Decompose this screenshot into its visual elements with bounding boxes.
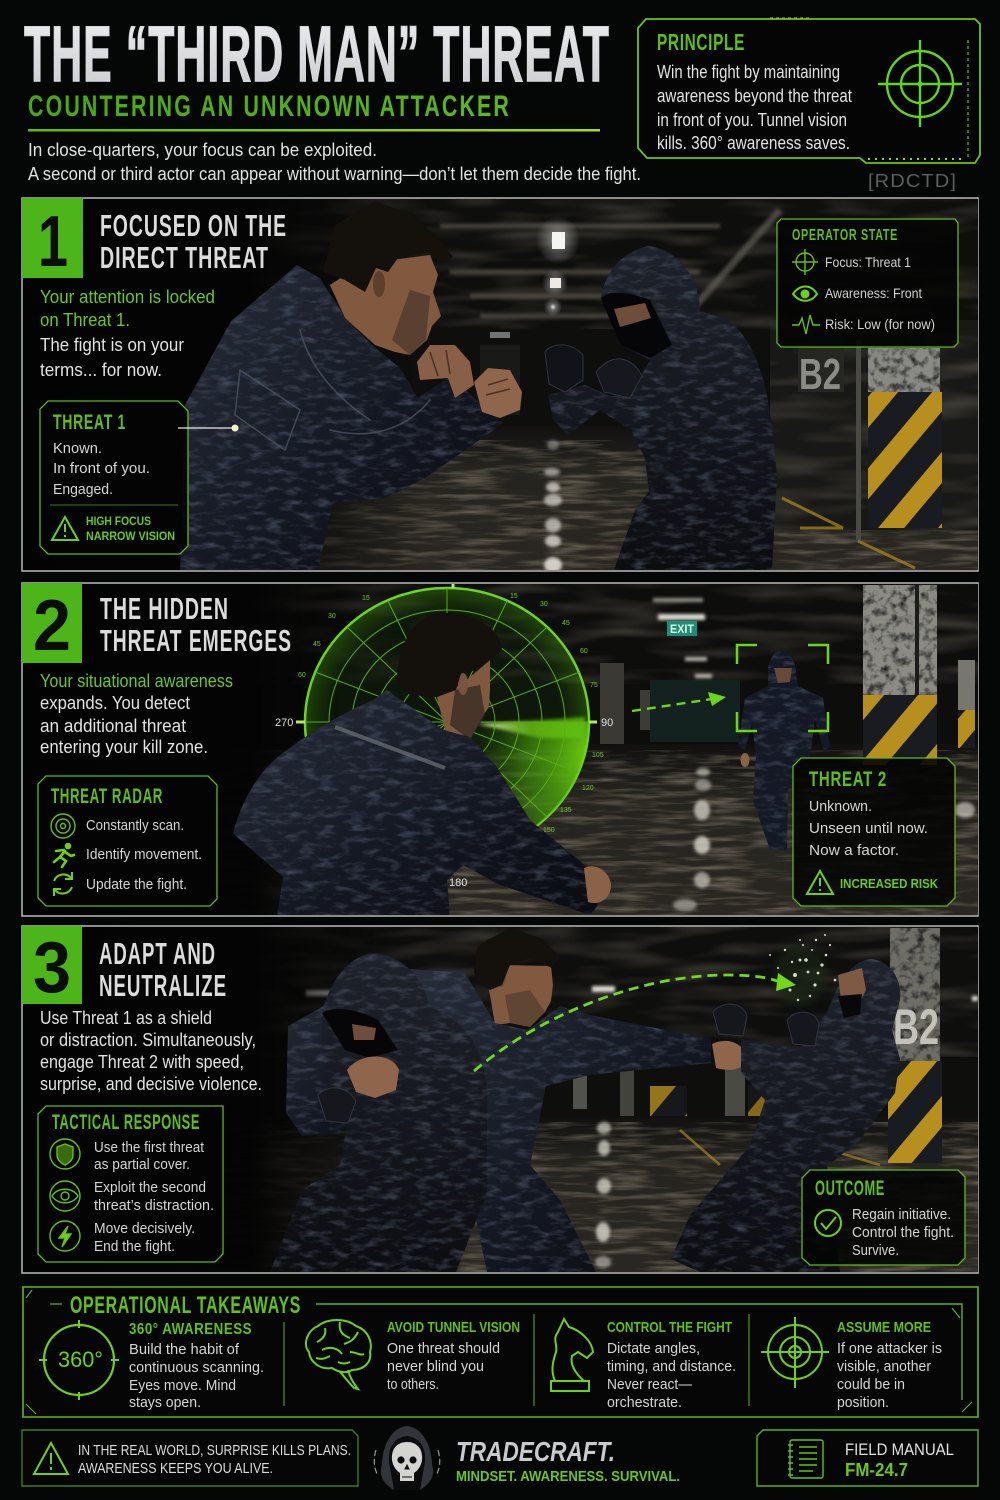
icon: brain	[306, 1320, 371, 1389]
icon: runner	[54, 844, 74, 867]
icon: chess knight	[551, 1319, 593, 1391]
callout: threat radar	[38, 776, 217, 906]
takeaway: assume more: If one attacker is	[837, 1340, 942, 1357]
takeaway: avoid tunnel vision: One threat should	[387, 1340, 500, 1357]
chart: radar sweep: 75	[590, 682, 598, 689]
intro text: In close-quarters, your focus can be exploited.	[28, 140, 377, 160]
header: title block	[24, 9, 641, 184]
icon: notebook checklist	[788, 1440, 823, 1478]
callout: threat radar: Constantly scan.	[86, 817, 184, 834]
callout: threat 1: HIGH FOCUS	[86, 514, 151, 528]
icon: focus crosshair	[792, 249, 818, 275]
callout: tactical response: TACTICAL RESPONSE	[52, 1111, 200, 1134]
callout: outcome	[802, 1170, 965, 1265]
callout: threat 2: Now a factor.	[809, 842, 899, 859]
step 2 heading: THREAT EMERGES	[100, 623, 292, 658]
principle body: awareness beyond the threat	[657, 86, 852, 106]
brand: tradecraft: TRADECRAFT.	[456, 1436, 615, 1467]
takeaway: avoid tunnel vision: to others.	[387, 1376, 439, 1393]
callout: field manual: FIELD MANUAL	[845, 1440, 954, 1459]
callout: threat 2	[793, 758, 955, 906]
callout: threat radar: Identify movement.	[86, 846, 202, 863]
callout: tactical response: threat’s distraction.	[94, 1197, 214, 1214]
detection brackets	[737, 645, 828, 731]
callout: field manual	[757, 1430, 978, 1486]
radar bearing labels: 90	[601, 717, 613, 729]
callout: threat 2: THREAT 2	[809, 768, 887, 791]
callout: threat 1: NARROW VISION	[86, 529, 175, 543]
icon: 360 dial	[39, 1320, 119, 1400]
callout: operator state: OPERATOR STATE	[792, 227, 898, 244]
takeaway: control the fight: Dictate angles,	[607, 1340, 700, 1357]
callout: operator state: Risk: Low (for now)	[825, 316, 935, 332]
callout: operator state: Awareness: Front	[825, 285, 922, 301]
panel: principle	[638, 18, 980, 163]
figure: threat 2 distant	[738, 650, 830, 850]
figure: operator striking	[286, 928, 746, 1272]
principle heading: PRINCIPLE	[657, 29, 745, 55]
step 1 text	[40, 287, 215, 380]
callout: threat 1: Known.	[53, 440, 102, 457]
intro text: A second or third actor can appear without warning—don’t let them decide the fight.	[28, 164, 641, 184]
radar bearing labels: 270	[275, 717, 293, 729]
step 2 text: Your situational awareness	[40, 671, 233, 691]
callout: operator state: Focus: Threat 1	[825, 254, 911, 270]
icon: pulse	[792, 315, 820, 334]
arrow: strike path	[474, 973, 796, 1071]
logo: hooded skull	[374, 1426, 440, 1490]
garage background	[278, 927, 978, 1272]
figure: threat 2 being struck	[671, 959, 900, 1272]
step number 1	[22, 198, 83, 282]
redacted stamp: [RDCTD]	[868, 171, 957, 191]
step 1 text: on Threat 1.	[40, 310, 130, 330]
chart: radar sweep: 105	[592, 752, 604, 759]
figure: threat 1 hooded attacker	[545, 246, 777, 570]
panel: step 2 the hidden threat emerges	[22, 572, 978, 917]
icon: target	[761, 1317, 829, 1388]
icon: check	[815, 1210, 841, 1236]
takeaway: 360 awareness: 360° AWARENESS	[129, 1321, 252, 1338]
chart: radar sweep: 150	[543, 827, 555, 834]
exit sign: EXIT	[670, 622, 695, 636]
step 2 text: entering your kill zone.	[40, 737, 208, 757]
callout: outcome: Survive.	[852, 1242, 899, 1259]
panel: step 3 adapt and neutralize	[22, 926, 978, 1273]
takeaway: avoid tunnel vision: AVOID TUNNEL VISION	[387, 1319, 520, 1336]
figure: threat 1 held as shield	[270, 953, 487, 1272]
icon: warning triangle	[52, 517, 78, 540]
callout: surprise warning: IN THE REAL WORLD, SURPRISE KILLS PLANS.	[78, 1442, 351, 1459]
step number 3: 3	[33, 928, 71, 1008]
takeaway: assume more: ASSUME MORE	[837, 1319, 931, 1336]
brand: tradecraft	[456, 1436, 680, 1485]
step 3 text	[40, 1008, 262, 1094]
callout: threat 2: INCREASED RISK	[840, 876, 939, 891]
step 3 text: surprise, and decisive violence.	[40, 1074, 262, 1094]
takeaway: 360 awareness: Build the habit of	[129, 1341, 240, 1358]
callout: tactical response	[38, 1106, 223, 1262]
callout: surprise warning: AWARENESS KEEPS YOU ALIVE.	[78, 1460, 273, 1477]
callout: surprise warning	[22, 1430, 358, 1486]
step number 2: 2	[33, 586, 71, 666]
garage background	[279, 584, 978, 915]
chart: radar sweep: 60	[580, 648, 588, 655]
step 2 text: expands. You detect	[40, 693, 190, 713]
callout: outcome: Control the fight.	[852, 1224, 954, 1241]
takeaways heading: OPERATIONAL TAKEAWAYS	[70, 1292, 301, 1319]
step 3 heading: ADAPT AND	[99, 936, 216, 971]
takeaway: avoid tunnel vision	[306, 1319, 520, 1393]
icon: scan	[51, 814, 75, 838]
green rule	[28, 129, 600, 132]
icon: warning triangle	[34, 1443, 68, 1474]
chart: radar sweep: 15	[510, 593, 518, 600]
callout: field manual: FM-24.7	[845, 1460, 908, 1480]
icon: update arrows	[54, 872, 72, 896]
chart: radar sweep: 45	[562, 620, 570, 627]
radar bearing labels: 0	[450, 572, 456, 584]
chart: radar sweep: 60	[298, 672, 306, 679]
step 2 text: an additional threat	[40, 716, 186, 736]
takeaway: control the fight: CONTROL THE FIGHT	[607, 1319, 732, 1336]
callout: outcome: OUTCOME	[815, 1177, 885, 1200]
step number 3	[22, 926, 82, 1008]
callout: outcome: Regain initiative.	[852, 1206, 951, 1223]
step 3 text: engage Threat 2 with speed,	[40, 1052, 244, 1072]
figure: operator scanning	[233, 613, 611, 917]
callout: tactical response: Exploit the second	[94, 1179, 206, 1196]
takeaway: assume more: could be in	[837, 1376, 905, 1393]
takeaway: assume more	[761, 1317, 942, 1411]
icon: crosshair target	[878, 40, 962, 127]
takeaway: control the fight: Never react—	[607, 1376, 692, 1393]
callout: threat radar: THREAT RADAR	[51, 785, 163, 808]
step 1 text: terms... for now.	[40, 360, 162, 380]
principle body: Win the fight by maintaining	[657, 62, 840, 82]
callout: threat 1: Engaged.	[53, 481, 113, 498]
takeaway: assume more: visible, another	[837, 1358, 931, 1375]
chart: radar sweep	[275, 572, 613, 889]
intro text	[28, 140, 641, 184]
callout: operator state	[777, 219, 958, 347]
callout: tactical response: Move decisively.	[94, 1220, 195, 1237]
step 3 text: Use Threat 1 as a shield	[40, 1008, 212, 1028]
callout: tactical response: End the fight.	[94, 1238, 175, 1255]
principle body: in front of you. Tunnel vision	[657, 110, 847, 130]
principle body	[657, 62, 852, 153]
icon: warning triangle	[807, 871, 833, 894]
step 1 text: Your attention is locked	[40, 287, 215, 307]
step number 2	[22, 583, 82, 666]
icon: eye target	[50, 1181, 80, 1211]
garage background: B2	[893, 999, 939, 1055]
chart: radar sweep: 120	[582, 785, 594, 792]
icon: shield	[50, 1139, 80, 1169]
step 1 heading	[100, 208, 287, 275]
step 2 heading: THE HIDDEN	[100, 591, 229, 626]
panel: step 1 focused on the direct threat	[22, 198, 978, 573]
subtitle: COUNTERING AN UNKNOWN ATTACKER	[28, 90, 511, 123]
panel: operational takeaways	[23, 1287, 978, 1417]
step 1 heading: DIRECT THREAT	[100, 240, 269, 275]
callout: threat 1: THREAT 1	[53, 411, 126, 434]
step 1 heading: FOCUSED ON THE	[100, 208, 287, 243]
step 3 text: or distraction. Simultaneously,	[40, 1030, 256, 1050]
icon: lightning	[50, 1221, 80, 1251]
takeaway: 360 awareness: Eyes move. Mind	[129, 1377, 236, 1394]
step 3 heading	[99, 936, 227, 1003]
chart: radar sweep: 45	[313, 641, 321, 648]
brand: tradecraft: MINDSET. AWARENESS. SURVIVAL.	[456, 1468, 680, 1485]
radar bearing labels	[276, 718, 613, 886]
chart: radar sweep: 15	[362, 595, 370, 602]
garage background: B2	[799, 350, 841, 399]
step number 1: 1	[38, 202, 68, 282]
icon: eye	[793, 286, 817, 301]
takeaway: 360 awareness	[39, 1320, 264, 1411]
principle body: kills. 360° awareness saves.	[657, 133, 850, 153]
chart: radar sweep: 30	[328, 613, 336, 620]
step 2 text	[40, 671, 233, 757]
takeaway: avoid tunnel vision: never blind you	[387, 1358, 484, 1375]
takeaway: control the fight: timing, and distance.	[607, 1358, 736, 1375]
garage background	[318, 199, 978, 570]
callout: threat 2: Unseen until now.	[809, 820, 928, 837]
step 2 heading	[100, 591, 292, 658]
takeaway: control the fight	[551, 1319, 736, 1411]
callout: tactical response: as partial cover.	[94, 1156, 190, 1173]
takeaway: 360 awareness: continuous scanning.	[129, 1359, 264, 1376]
step 3 heading: NEUTRALIZE	[99, 968, 227, 1003]
callout: threat 1: In front of you.	[53, 460, 150, 477]
radar bearing labels: 180	[449, 877, 467, 889]
callout: tactical response: Use the first threat	[94, 1139, 205, 1156]
takeaway: 360 awareness: stays open.	[129, 1394, 201, 1411]
icon: 360 dial: 360°	[58, 1347, 103, 1372]
takeaway: control the fight: orchestrate.	[607, 1394, 682, 1411]
chart: radar sweep: 30	[540, 601, 548, 608]
callout: threat 1	[40, 401, 238, 554]
step 1 text: The fight is on your	[40, 335, 184, 355]
arrow: detection	[632, 692, 726, 711]
impact spray	[769, 934, 836, 1005]
callout: threat 2: Unknown.	[809, 798, 872, 815]
figure: operator left	[180, 201, 522, 570]
chart: radar sweep: 135	[560, 807, 572, 814]
takeaway: assume more: position.	[837, 1394, 889, 1411]
callout: threat radar: Update the fight.	[86, 876, 187, 893]
